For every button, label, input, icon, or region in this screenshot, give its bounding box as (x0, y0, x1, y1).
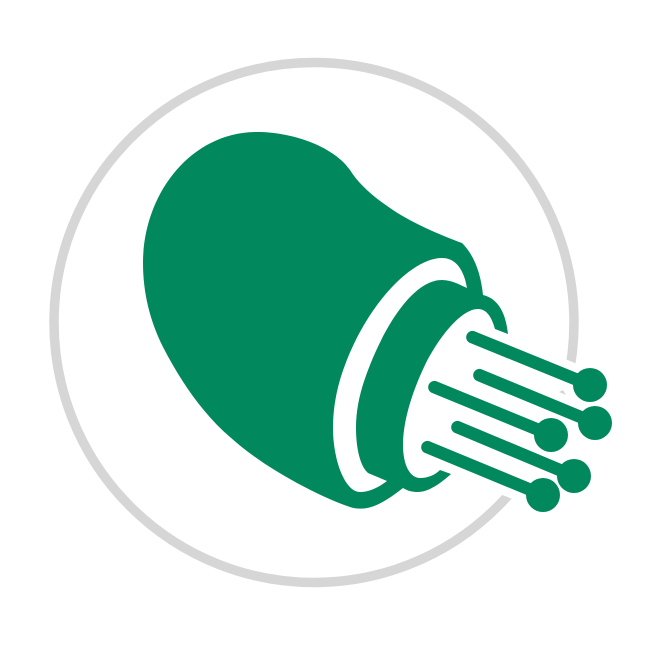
fiber 1 (466, 331, 607, 402)
fiber 4 (451, 421, 591, 493)
fibers (421, 331, 612, 512)
fiber 5 (421, 441, 560, 512)
cable body (143, 132, 508, 509)
fiber 2 (473, 369, 612, 440)
insulation ring gap (333, 258, 467, 492)
gray ring (54, 62, 620, 582)
fiber 3 (428, 381, 568, 452)
